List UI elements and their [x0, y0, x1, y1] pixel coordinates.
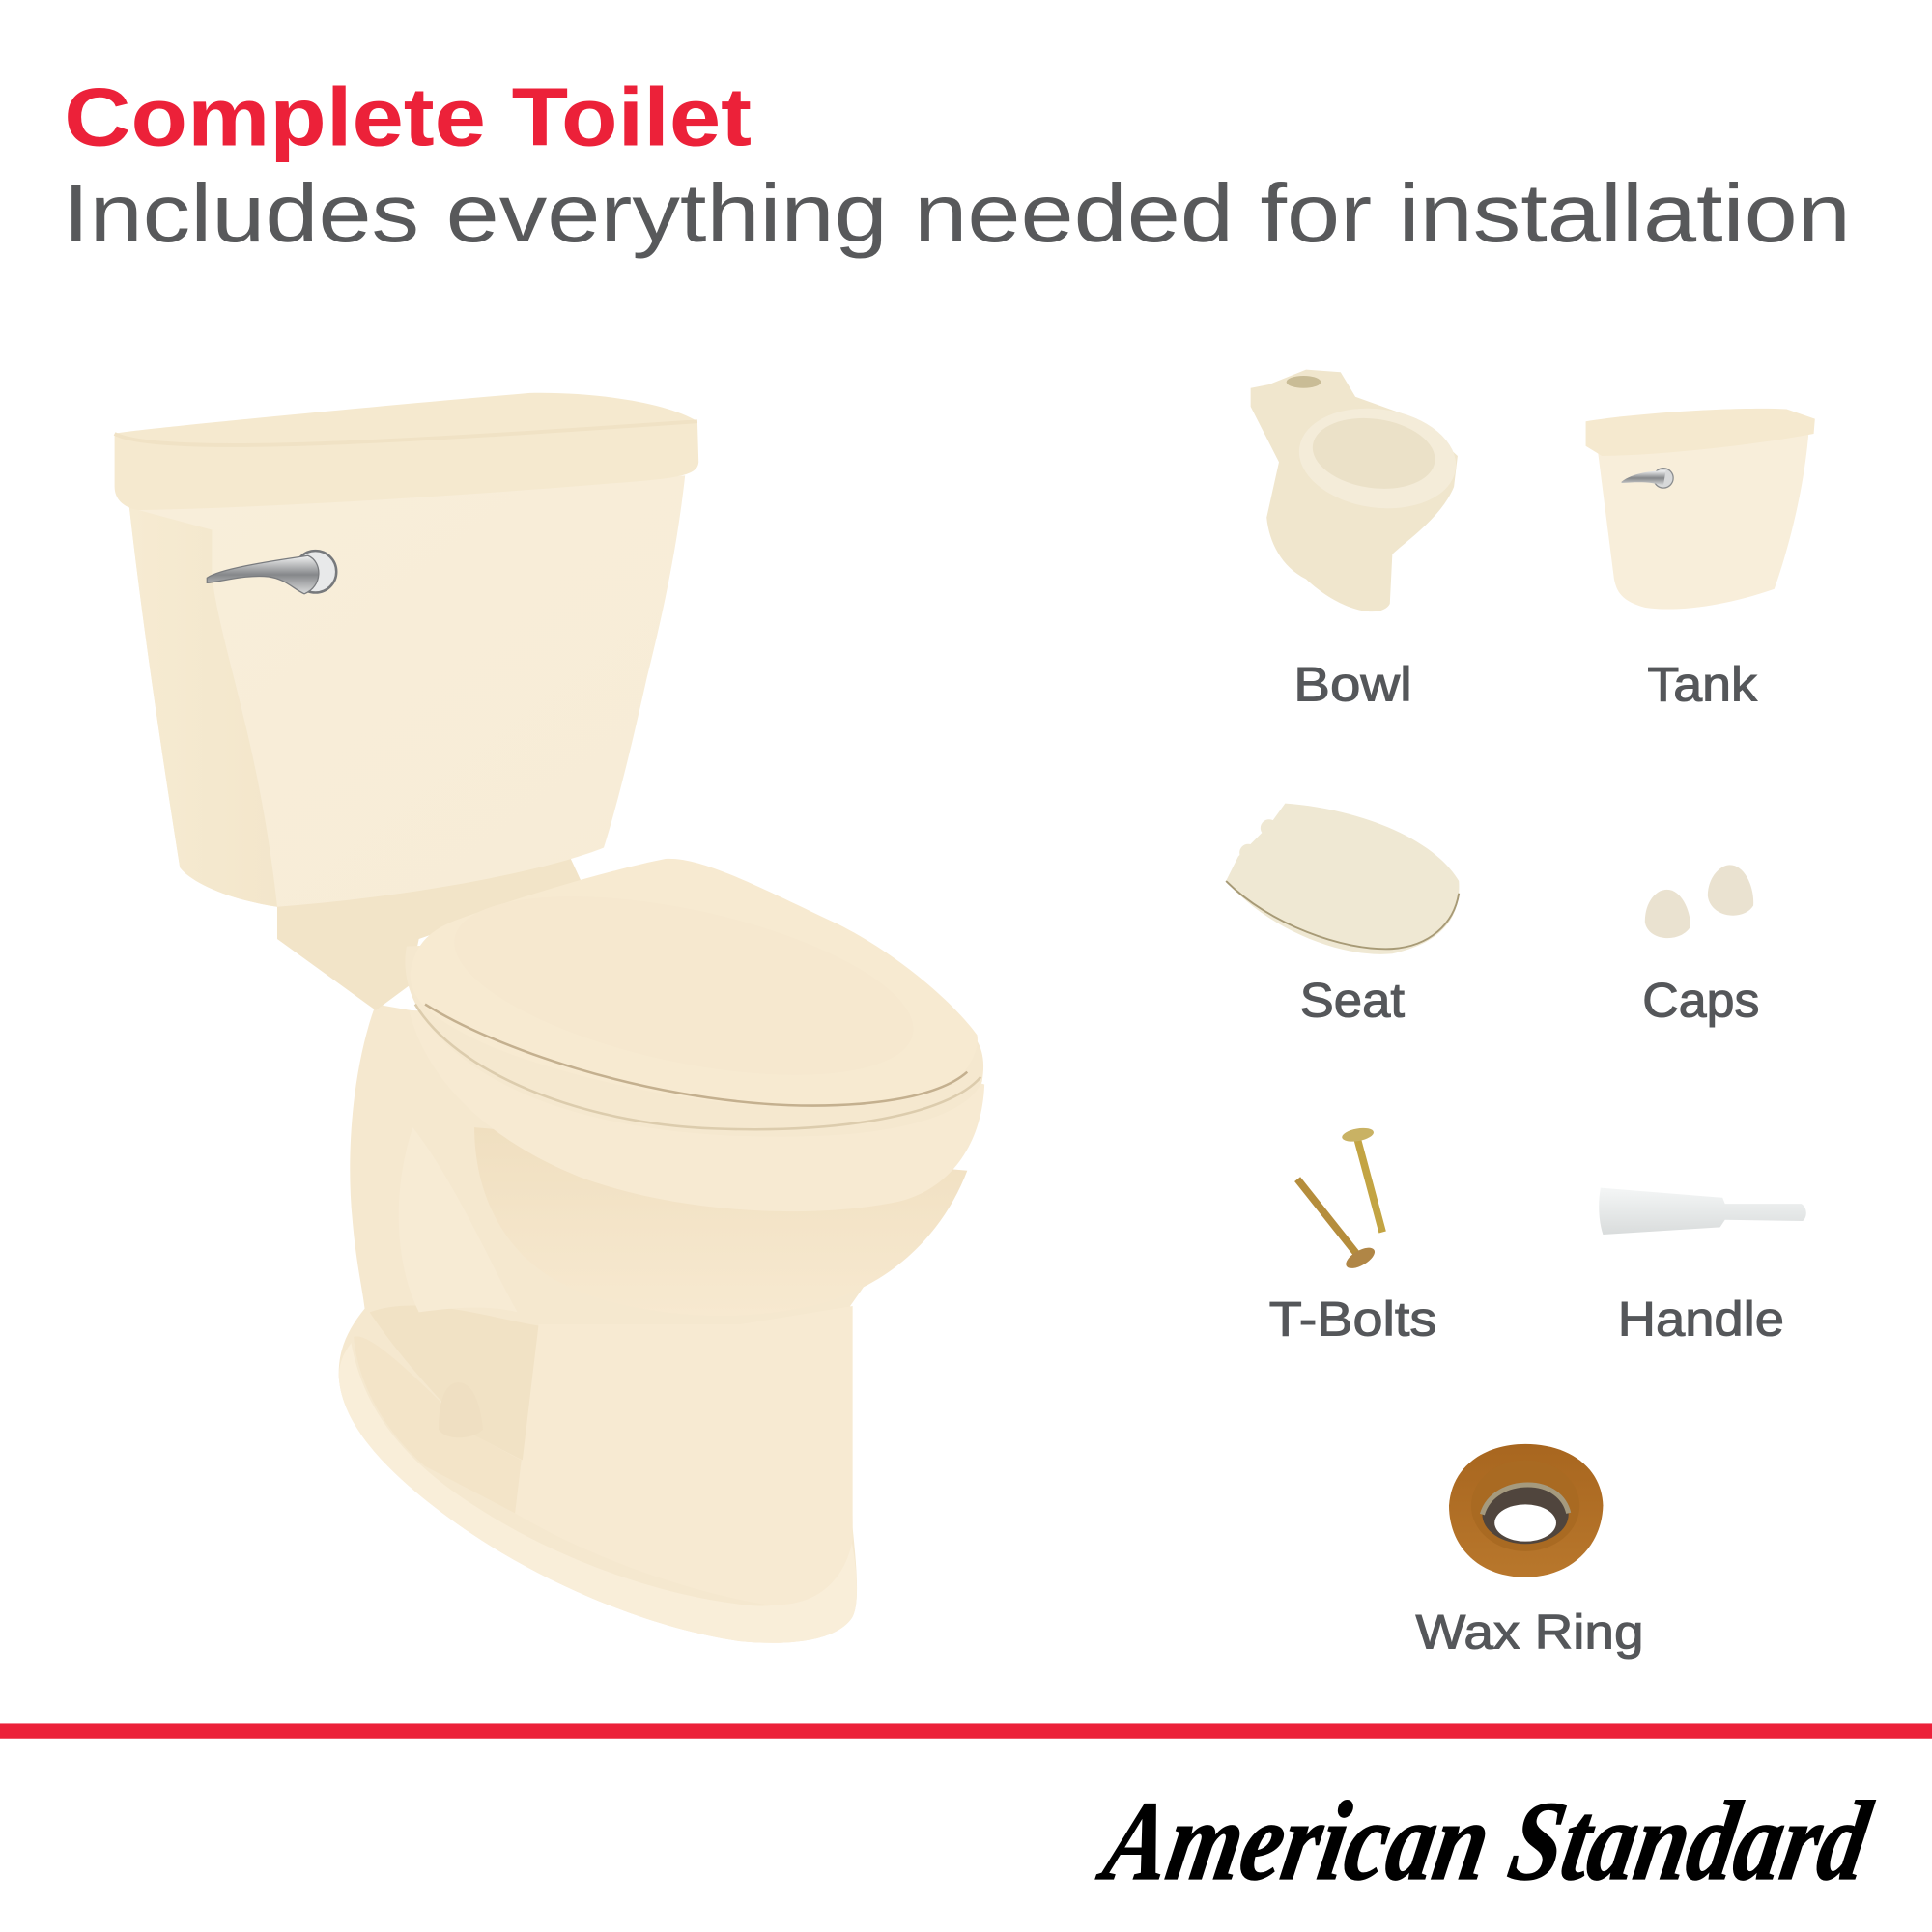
seat ring [405, 936, 983, 1137]
title: Complete Toilet [64, 72, 752, 164]
icon: t-bolts [1297, 1126, 1382, 1272]
tank lid [115, 393, 698, 510]
red divider bar [0, 1723, 1932, 1739]
label: tank: Tank [1647, 658, 1757, 712]
trapway recess [370, 1305, 538, 1460]
icon: wax ring [1449, 1444, 1603, 1577]
toilet rear body and base [339, 1005, 936, 1643]
tank neck [277, 850, 582, 1010]
pedestal front [515, 1306, 853, 1605]
bowl rim [409, 1010, 984, 1211]
bowl [474, 1127, 967, 1316]
label: bowl: Bowl [1293, 658, 1412, 712]
label: wax ring: Wax Ring [1416, 1605, 1644, 1660]
floor bolt cap [439, 1382, 483, 1437]
label: caps: Caps [1642, 973, 1759, 1027]
toilet foot surface [354, 1336, 522, 1513]
flush handle [207, 551, 336, 594]
label: seat: Seat [1300, 973, 1405, 1027]
tank body [129, 475, 685, 907]
panel: included parts [1226, 370, 1815, 1660]
label: t-bolts: T-Bolts [1269, 1293, 1436, 1347]
icon: handle [1599, 1188, 1806, 1235]
icon: bowl [1251, 370, 1463, 611]
subtitle: Includes everything needed for installation [63, 168, 1851, 260]
icon: caps [1645, 865, 1753, 938]
icon: tank [1586, 409, 1815, 610]
main toilet illustration [115, 393, 984, 1643]
toilet foot rim [339, 1343, 857, 1643]
seat lid [411, 859, 978, 1106]
label: handle: Handle [1618, 1293, 1784, 1347]
icon: seat [1226, 804, 1459, 954]
tank side face [129, 508, 277, 907]
